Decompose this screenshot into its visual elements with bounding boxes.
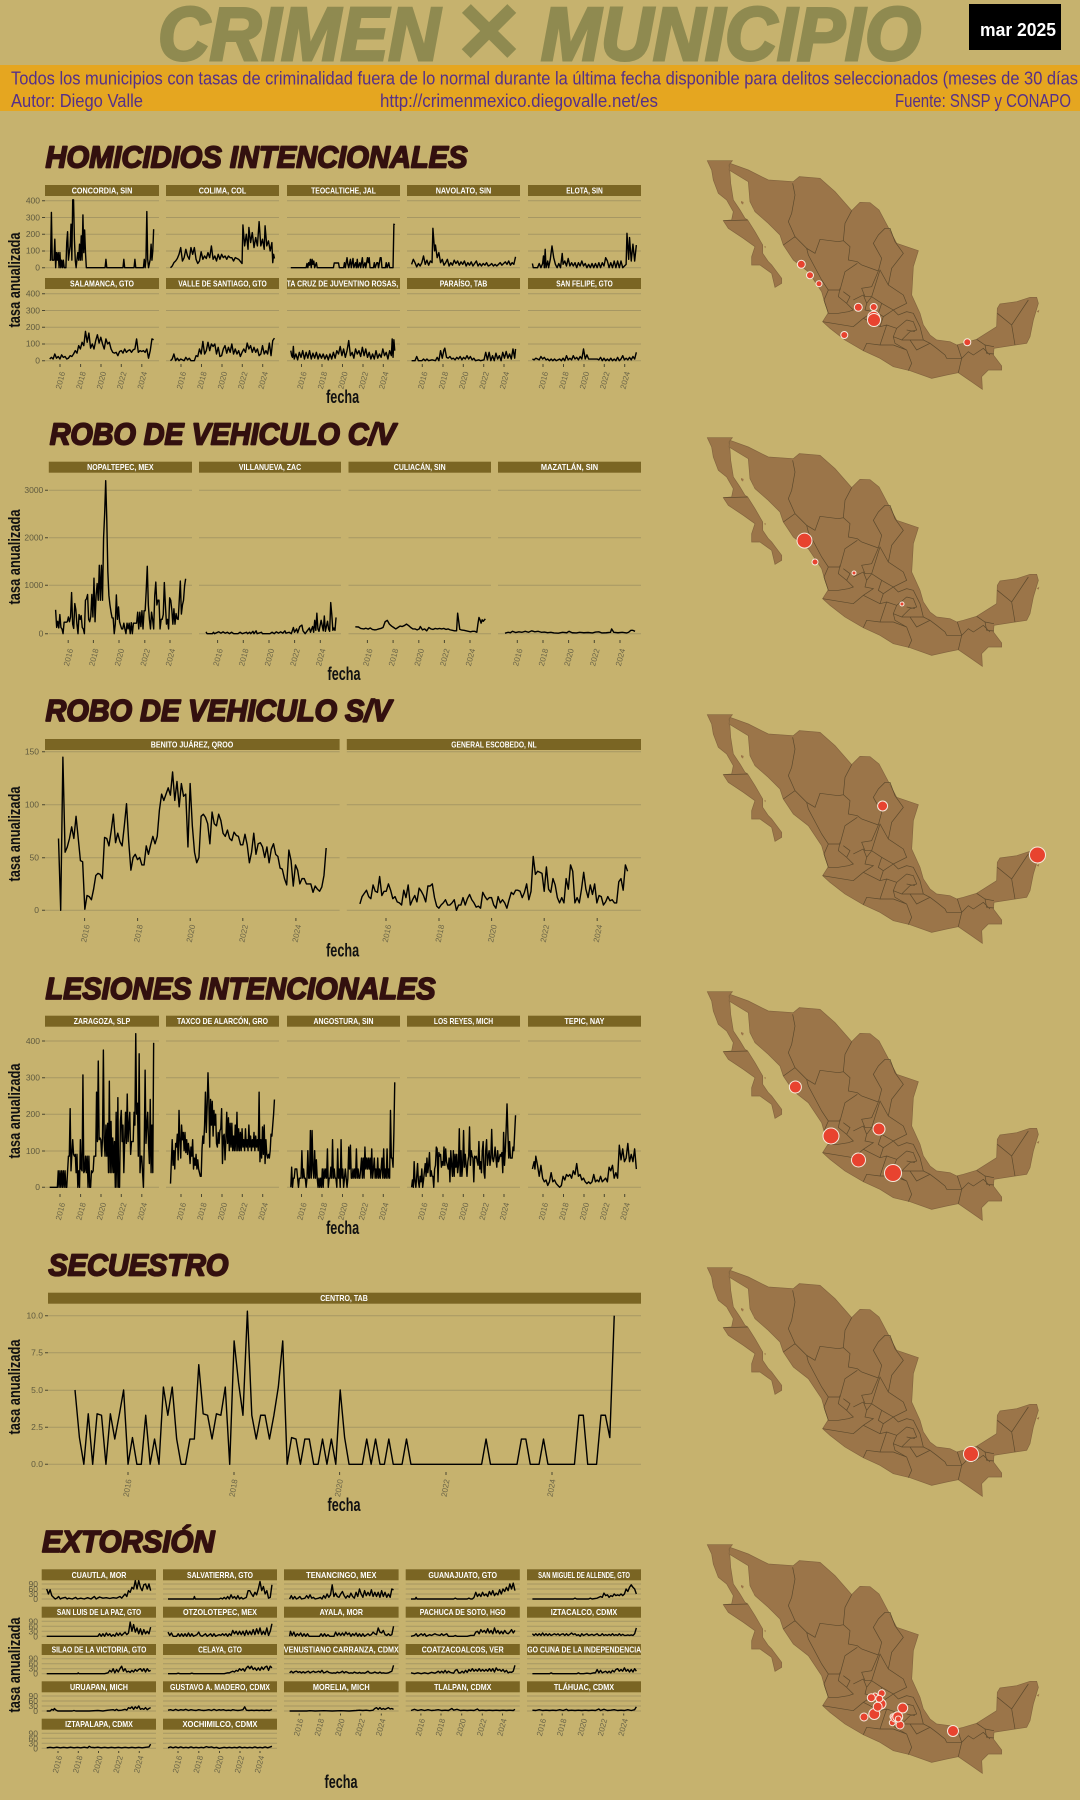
x axis ticks and years: 2018 bbox=[87, 647, 101, 667]
x axis label: fecha bbox=[326, 940, 360, 960]
x axis ticks and years: 2016 bbox=[212, 647, 225, 667]
x axis label: fecha bbox=[328, 1495, 361, 1515]
x axis ticks and years: 2020 bbox=[457, 370, 471, 390]
subtitle band: http://crimenmexico.diegovalle.net/es bbox=[380, 91, 658, 111]
chart: Benito Juárez: BENITO JUÁREZ, QROO bbox=[151, 740, 234, 750]
chart: Pachuca de Soto bbox=[406, 1607, 520, 1636]
y axis ticks: 30 bbox=[29, 1738, 38, 1748]
chart: Venustiano Carranza bbox=[284, 1644, 399, 1674]
x axis ticks and years: 2022 bbox=[236, 370, 250, 390]
x axis ticks and years: 2016 bbox=[535, 1717, 548, 1737]
x axis ticks and years: 2020 bbox=[336, 370, 350, 390]
y axis ticks: 300 bbox=[26, 212, 40, 222]
x axis label: fecha bbox=[326, 1218, 360, 1238]
x axis ticks and years: 2016 bbox=[292, 1717, 306, 1737]
chart: Celaya bbox=[163, 1644, 277, 1674]
x axis ticks and years: 2022 bbox=[478, 1201, 491, 1221]
x axis ticks and years: 2018 bbox=[75, 370, 88, 390]
x axis ticks and years: 2022 bbox=[598, 370, 612, 390]
chart: San Luis de la Paz bbox=[42, 1607, 156, 1636]
x axis ticks and years: 2018 bbox=[71, 1754, 85, 1774]
x axis ticks and years: 2022 bbox=[475, 1717, 489, 1737]
y axis ticks: 30 bbox=[29, 1664, 38, 1674]
x axis ticks and years: 2022 bbox=[236, 1201, 250, 1221]
chart: Concordia bbox=[45, 185, 159, 268]
y axis ticks: 0 bbox=[33, 1743, 38, 1753]
chart: Ayala bbox=[284, 1607, 399, 1636]
y axis ticks: 3000 bbox=[24, 485, 44, 495]
x axis ticks and years: 2024 bbox=[136, 370, 149, 390]
chart: Elota: ELOTA, SIN bbox=[566, 186, 603, 196]
y axis ticks: 2.5 bbox=[31, 1422, 43, 1432]
x axis ticks and years: 2018 bbox=[132, 923, 145, 943]
chart: Tepic: TEPIC, NAY bbox=[564, 1016, 605, 1026]
y axis ticks: 0 bbox=[33, 1669, 38, 1679]
x axis ticks and years: 2016 bbox=[175, 370, 188, 390]
y axis ticks: 90 bbox=[29, 1579, 38, 1589]
panel: robo de vehiculo s/v bbox=[5, 693, 1046, 960]
x axis ticks and years bbox=[62, 640, 627, 667]
x axis ticks and years: 2020 bbox=[413, 647, 426, 667]
y axis ticks: 100 bbox=[26, 1146, 40, 1156]
chart: Xochimilco: XOCHIMILCO, CDMX bbox=[182, 1719, 258, 1729]
x axis ticks and years: 2016 bbox=[295, 370, 309, 390]
chart: Tenancingo: TENANCINGO, MEX bbox=[306, 1570, 377, 1580]
x axis ticks and years: 2022 bbox=[357, 1201, 370, 1221]
x axis ticks and years: 2020 bbox=[333, 1478, 345, 1498]
date box: mar 2025 bbox=[980, 20, 1056, 40]
y axis label: tasa anualizada bbox=[5, 1063, 24, 1158]
chart: Ayala: AYALA, MOR bbox=[320, 1607, 363, 1617]
y axis ticks: 200 bbox=[26, 322, 40, 332]
chart: Mazatlán bbox=[498, 462, 641, 634]
x axis ticks and years: 2020 bbox=[263, 647, 276, 667]
x axis ticks and years: 2022 bbox=[478, 370, 491, 390]
x axis ticks and years: 2022 bbox=[438, 647, 452, 667]
x axis ticks and years: 2022 bbox=[588, 647, 602, 667]
y axis ticks: 30 bbox=[29, 1701, 38, 1711]
x axis ticks and years: 2020 bbox=[95, 1201, 108, 1221]
y axis ticks: 0 bbox=[33, 1706, 38, 1716]
y axis ticks: 90 bbox=[29, 1616, 38, 1626]
chart: Centro, Tab: CENTRO, TAB bbox=[320, 1293, 368, 1303]
chart: Teocaltiche: TEOCALTICHE, JAL bbox=[311, 186, 376, 196]
chart: Xochimilco bbox=[163, 1719, 277, 1748]
y axis ticks: 400 bbox=[26, 288, 40, 298]
chart: Angostura: ANGOSTURA, SIN bbox=[314, 1016, 374, 1026]
y axis ticks: 60 bbox=[29, 1584, 38, 1594]
chart: Gustavo A. Madero bbox=[163, 1681, 277, 1711]
x axis ticks and years: 2022 bbox=[357, 370, 370, 390]
x axis ticks and years: 2016 bbox=[122, 1478, 134, 1498]
x axis ticks and years: 2024 bbox=[164, 647, 177, 667]
chart: Navolato bbox=[407, 185, 520, 268]
chart: Cuautla: CUAUTLA, MOR bbox=[72, 1570, 126, 1580]
x axis ticks and years: 2016 bbox=[381, 923, 393, 943]
y axis ticks: 90 bbox=[29, 1728, 38, 1738]
y axis ticks: 60 bbox=[29, 1696, 38, 1706]
x axis ticks and years: 2024 bbox=[377, 370, 391, 390]
title bbox=[158, 0, 921, 89]
y axis ticks: 0 bbox=[35, 1182, 40, 1192]
map: robo s/v bbox=[707, 715, 1046, 943]
chart: Navolato: NAVOLATO, SIN bbox=[436, 186, 491, 196]
chart: San Felipe: SAN FELIPE, GTO bbox=[556, 278, 613, 288]
chart: Iztapalapa: IZTAPALAPA, CDMX bbox=[65, 1719, 133, 1729]
chart: Morelia bbox=[284, 1681, 399, 1711]
heading: homicidios: HOMICIDIOS INTENCIONALES bbox=[46, 140, 468, 174]
x axis ticks and years: 2020 bbox=[212, 1754, 226, 1774]
y axis ticks bbox=[29, 1579, 38, 1753]
x axis ticks and years: 2024 bbox=[619, 370, 632, 390]
x axis ticks and years: 2016 bbox=[537, 1201, 550, 1221]
chart: Valle de Santiago: VALLE DE SANTIAGO, GTO bbox=[178, 278, 267, 288]
y axis ticks: 60 bbox=[29, 1621, 38, 1631]
y axis ticks: 1000 bbox=[24, 580, 44, 590]
x axis ticks and years: 2020 bbox=[336, 1201, 350, 1221]
chart: Villanueva: VILLANUEVA, ZAC bbox=[239, 462, 301, 472]
x axis ticks and years: 2024 bbox=[592, 923, 604, 943]
chart: Iztapalapa bbox=[42, 1719, 156, 1748]
chart: San Luis de la Paz: SAN LUIS DE LA PAZ, GTO bbox=[57, 1607, 141, 1617]
x axis ticks and years: 2024 bbox=[136, 1201, 149, 1221]
x axis ticks and years: 2024 bbox=[132, 1754, 146, 1774]
x axis ticks and years: 2018 bbox=[434, 923, 446, 943]
chart: Tlalpan bbox=[406, 1681, 520, 1711]
x axis ticks and years: 2022 bbox=[596, 1717, 609, 1737]
chart: San Miguel de Allende bbox=[527, 1569, 641, 1599]
panel: homicidios intencionales bbox=[5, 140, 1039, 407]
map: lesiones bbox=[707, 992, 1039, 1220]
y axis ticks bbox=[26, 1310, 48, 1469]
x axis ticks and years: 2024 bbox=[464, 647, 477, 667]
y axis ticks: 90 bbox=[29, 1691, 38, 1701]
y axis ticks: 30 bbox=[29, 1589, 38, 1599]
y axis label: tasa anualizada bbox=[5, 509, 24, 604]
chart: Mazatlán: MAZATLÁN, SIN bbox=[541, 462, 598, 472]
chart: Salvatierra: SALVATIERRA, GTO bbox=[187, 1570, 253, 1580]
map: extorsión bbox=[707, 1545, 1039, 1773]
x axis ticks and years bbox=[122, 1472, 558, 1498]
chart: Colima: COLIMA, COL bbox=[199, 186, 246, 196]
x axis label: fecha bbox=[324, 1772, 358, 1792]
chart: Iztacalco bbox=[527, 1607, 641, 1636]
y axis ticks bbox=[26, 1036, 45, 1192]
chart: Paraíso: PARAÍSO, TAB bbox=[440, 278, 487, 288]
chart: Dolores Hidalgo bbox=[470, 1644, 698, 1674]
y axis ticks: 30 bbox=[29, 1626, 38, 1636]
x axis ticks and years: 2020 bbox=[113, 647, 126, 667]
x axis label: fecha bbox=[326, 387, 360, 407]
x axis ticks and years: 2018 bbox=[555, 1717, 569, 1737]
chart: Celaya: CELAYA, GTO bbox=[198, 1644, 242, 1654]
x axis ticks and years: 2024 bbox=[314, 647, 328, 667]
chart: Taxco de Alarcón bbox=[166, 1015, 279, 1187]
x axis ticks and years: 2018 bbox=[437, 1201, 450, 1221]
panel: robo de vehiculo c/v bbox=[5, 416, 1039, 684]
x axis ticks and years: 2022 bbox=[539, 923, 551, 943]
chart: Iztacalco: IZTACALCO, CDMX bbox=[551, 1607, 618, 1617]
heading: extorsión: EXTORSIÓN bbox=[42, 1524, 215, 1559]
x axis ticks and years: 2024 bbox=[257, 370, 270, 390]
y axis ticks: 200 bbox=[26, 1109, 40, 1119]
x axis ticks and years bbox=[51, 1714, 630, 1774]
x axis ticks and years: 2020 bbox=[578, 370, 591, 390]
x axis ticks and years: 2016 bbox=[62, 647, 75, 667]
x axis ticks and years: 2016 bbox=[295, 1201, 309, 1221]
chart: Nopaltepec: NOPALTEPEC, MEX bbox=[87, 462, 154, 472]
map: secuestro bbox=[707, 1268, 1039, 1496]
chart: Angostura bbox=[287, 1016, 400, 1187]
x axis ticks and years: 2018 bbox=[316, 1201, 329, 1221]
x axis ticks and years: 2024 bbox=[617, 1717, 630, 1737]
x axis ticks and years: 2016 bbox=[537, 370, 550, 390]
y axis ticks: 100 bbox=[26, 339, 40, 349]
x axis ticks and years: 2024 bbox=[495, 1717, 509, 1737]
y axis ticks: 2000 bbox=[24, 532, 44, 542]
chart: Valle de Santiago bbox=[166, 278, 279, 361]
x axis ticks and years: 2018 bbox=[557, 370, 571, 390]
y axis label: tasa anualizada bbox=[5, 1617, 24, 1712]
x axis ticks and years: 2018 bbox=[387, 647, 400, 667]
y axis ticks: 60 bbox=[29, 1733, 38, 1743]
heading: robo s/v: ROBO DE VEHICULO S/V bbox=[46, 693, 394, 728]
y axis label: tasa anualizada bbox=[5, 1339, 24, 1434]
chart: Silao de la Victoria: SILAO DE LA VICTORIA, GTO bbox=[52, 1644, 147, 1654]
x axis ticks and years bbox=[79, 918, 604, 943]
x axis ticks and years: 2020 bbox=[578, 1201, 591, 1221]
subtitle band: Autor: Diego Valle bbox=[11, 91, 143, 111]
chart: Nopaltepec bbox=[49, 462, 192, 634]
y axis ticks: 200 bbox=[26, 229, 40, 239]
chart: Culiacán bbox=[348, 462, 491, 634]
subtitle band bbox=[0, 65, 1080, 111]
panel: extorsión bbox=[5, 1524, 1039, 1792]
y axis label: tasa anualizada bbox=[5, 786, 24, 882]
chart: Otzolotepec: OTZOLOTEPEC, MEX bbox=[183, 1607, 257, 1617]
y axis label: tasa anualizada bbox=[5, 232, 24, 328]
x axis ticks and years: 2018 bbox=[237, 647, 251, 667]
x axis ticks and years: 2016 bbox=[416, 370, 430, 390]
chart: Coatzacoalcos: COATZACOALCOS, VER bbox=[422, 1644, 504, 1654]
map: homicidios bbox=[707, 161, 1039, 389]
y axis ticks: 50 bbox=[30, 852, 39, 862]
x axis ticks and years: 2018 bbox=[313, 1717, 326, 1737]
chart: Pachuca de Soto: PACHUCA DE SOTO, HGO bbox=[420, 1607, 506, 1617]
chart: Tepic bbox=[528, 1016, 641, 1187]
x axis ticks and years: 2018 bbox=[195, 370, 209, 390]
x axis ticks and years: 2020 bbox=[91, 1754, 105, 1774]
chart: Los Reyes: LOS REYES, MICH bbox=[434, 1016, 493, 1026]
x axis ticks and years: 2020 bbox=[216, 370, 229, 390]
x axis ticks and years: 2016 bbox=[51, 1754, 64, 1774]
chart: Centro, Tab bbox=[48, 1293, 641, 1464]
chart: San Felipe bbox=[528, 278, 641, 361]
chart: Uruapan: URUAPAN, MICH bbox=[70, 1682, 128, 1692]
chart: Tenancingo bbox=[284, 1569, 399, 1599]
chart: Villanueva bbox=[199, 462, 341, 634]
y axis ticks: 0 bbox=[33, 1631, 38, 1641]
chart: Cuautla bbox=[42, 1569, 156, 1599]
x axis ticks and years: 2024 bbox=[614, 647, 627, 667]
x axis ticks and years: 2018 bbox=[557, 1201, 571, 1221]
chart: Morelia: MORELIA, MICH bbox=[313, 1682, 370, 1692]
chart: San Miguel de Allende: SAN MIGUEL DE ALLENDE, GTO bbox=[538, 1570, 630, 1580]
x axis ticks and years: 2018 bbox=[316, 370, 329, 390]
x axis ticks and years: 2016 bbox=[416, 1201, 430, 1221]
chart: Benito Juárez bbox=[45, 739, 340, 910]
chart: Concordia: CONCORDIA, SIN bbox=[72, 186, 132, 196]
x axis ticks and years bbox=[54, 364, 632, 390]
y axis ticks: 0.0 bbox=[31, 1459, 43, 1469]
chart: General Escobedo: GENERAL ESCOBEDO, NL bbox=[451, 740, 537, 750]
x axis ticks and years bbox=[54, 1194, 632, 1221]
y axis ticks bbox=[25, 746, 45, 915]
x axis ticks and years: 2022 bbox=[289, 647, 302, 667]
y axis ticks: 300 bbox=[26, 305, 40, 315]
y axis ticks bbox=[24, 485, 48, 638]
heading: secuestro: SECUESTRO bbox=[48, 1248, 228, 1282]
chart: Gustavo A. Madero: GUSTAVO A. MADERO, CDMX bbox=[170, 1682, 270, 1692]
x axis ticks and years: 2018 bbox=[228, 1478, 240, 1498]
x axis ticks and years: 2020 bbox=[95, 370, 108, 390]
y axis ticks: 0 bbox=[33, 1594, 38, 1604]
y axis ticks: 300 bbox=[26, 1072, 40, 1082]
chart: Colima bbox=[166, 185, 279, 268]
x axis ticks and years: 2022 bbox=[238, 923, 250, 943]
chart: Teocaltiche bbox=[287, 185, 400, 268]
x axis ticks and years: 2018 bbox=[434, 1717, 447, 1737]
x axis ticks and years: 2024 bbox=[374, 1717, 388, 1737]
x axis ticks and years: 2018 bbox=[75, 1201, 88, 1221]
chart: Paraíso bbox=[407, 278, 520, 361]
y axis ticks bbox=[26, 196, 45, 366]
x axis ticks and years: 2020 bbox=[486, 923, 499, 943]
y axis ticks: 5.0 bbox=[31, 1385, 43, 1395]
x axis ticks and years: 2016 bbox=[171, 1754, 184, 1774]
y axis ticks: 100 bbox=[26, 246, 40, 256]
x axis ticks and years: 2022 bbox=[139, 647, 152, 667]
x axis ticks and years: 2022 bbox=[598, 1201, 612, 1221]
x axis label: fecha bbox=[328, 664, 361, 684]
chart: Salamanca bbox=[45, 278, 159, 361]
y axis ticks: 90 bbox=[29, 1654, 38, 1664]
chart: Coatzacoalcos bbox=[406, 1644, 520, 1674]
y axis ticks: 100 bbox=[25, 800, 39, 810]
x axis ticks and years: 2022 bbox=[233, 1754, 246, 1774]
x axis ticks and years: 2020 bbox=[216, 1201, 229, 1221]
heading: lesiones: LESIONES INTENCIONALES bbox=[46, 971, 436, 1006]
x axis ticks and years: 2024 bbox=[498, 1201, 511, 1221]
chart: Zaragoza: ZARAGOZA, SLP bbox=[74, 1016, 130, 1026]
chart: Guanajuato: GUANAJUATO, GTO bbox=[428, 1570, 497, 1580]
chart: Guanajuato bbox=[406, 1569, 520, 1599]
x axis ticks and years: 2024 bbox=[546, 1478, 558, 1498]
chart: Silao de la Victoria bbox=[42, 1644, 156, 1674]
x axis ticks and years: 2016 bbox=[361, 647, 375, 667]
chart: Taxco de Alarcón: TAXCO DE ALARCÓN, GRO bbox=[177, 1015, 268, 1026]
y axis ticks: 10.0 bbox=[26, 1310, 43, 1320]
x axis ticks and years: 2020 bbox=[576, 1717, 589, 1737]
x axis ticks and years: 2022 bbox=[440, 1478, 452, 1498]
x axis ticks and years: 2016 bbox=[414, 1717, 427, 1737]
y axis ticks: 0 bbox=[35, 356, 40, 366]
x axis ticks and years: 2020 bbox=[185, 923, 197, 943]
y axis ticks: 60 bbox=[29, 1659, 38, 1669]
panel: secuestro bbox=[5, 1248, 1039, 1515]
chart: General Escobedo bbox=[347, 739, 641, 910]
x axis ticks and years: 2016 bbox=[79, 923, 92, 943]
x axis ticks and years: 2024 bbox=[377, 1201, 391, 1221]
x axis ticks and years: 2024 bbox=[253, 1754, 266, 1774]
x axis ticks and years: 2018 bbox=[437, 370, 450, 390]
chart: Uruapan bbox=[42, 1681, 156, 1711]
chart: Los Reyes bbox=[407, 1016, 520, 1187]
x axis ticks and years: 2016 bbox=[54, 1201, 67, 1221]
x axis ticks and years: 2022 bbox=[115, 1201, 129, 1221]
panel: lesiones intencionales bbox=[5, 971, 1039, 1238]
x axis ticks and years: 2024 bbox=[498, 370, 511, 390]
x axis ticks and years: 2018 bbox=[537, 647, 550, 667]
chart: Elota bbox=[528, 185, 641, 268]
x axis ticks and years: 2022 bbox=[115, 370, 129, 390]
chart: Tláhuac: TLÁHUAC, CDMX bbox=[554, 1682, 614, 1692]
y axis ticks: 7.5 bbox=[31, 1348, 43, 1358]
chart: Otzolotepec bbox=[163, 1607, 277, 1636]
y axis ticks: 150 bbox=[25, 746, 39, 756]
x axis ticks and years: 2018 bbox=[195, 1201, 209, 1221]
x axis ticks and years: 2016 bbox=[511, 647, 525, 667]
heading: robo c/v: ROBO DE VEHICULO C/V bbox=[50, 416, 398, 452]
x axis ticks and years: 2016 bbox=[54, 370, 67, 390]
x axis ticks and years: 2024 bbox=[291, 923, 303, 943]
x axis ticks and years: 2022 bbox=[112, 1754, 125, 1774]
y axis ticks: 0 bbox=[35, 262, 40, 272]
x axis ticks and years: 2024 bbox=[619, 1201, 632, 1221]
x axis ticks and years: 2020 bbox=[457, 1201, 471, 1221]
chart: Culiacán: CULIACÁN, SIN bbox=[394, 462, 446, 472]
x axis ticks and years: 2020 bbox=[563, 647, 576, 667]
date box bbox=[969, 4, 1061, 50]
y axis ticks: 0 bbox=[39, 628, 44, 638]
chart: Tlalpan: TLALPAN, CDMX bbox=[434, 1682, 492, 1692]
x axis ticks and years: 2016 bbox=[175, 1201, 188, 1221]
x axis ticks and years: 2018 bbox=[192, 1754, 205, 1774]
y axis ticks: 400 bbox=[26, 196, 40, 206]
chart: Salvatierra bbox=[163, 1569, 277, 1599]
x axis ticks and years: 2020 bbox=[455, 1717, 468, 1737]
chart: Santa Cruz de Juventino Rosas bbox=[272, 278, 415, 361]
y axis ticks: 0 bbox=[34, 905, 39, 915]
x axis ticks and years: 2020 bbox=[333, 1717, 347, 1737]
x axis ticks and years: 2022 bbox=[354, 1717, 367, 1737]
map: robo c/v bbox=[707, 438, 1039, 666]
chart: Salamanca: SALAMANCA, GTO bbox=[70, 278, 134, 288]
chart: Zaragoza bbox=[45, 1016, 159, 1187]
y axis ticks: 400 bbox=[26, 1036, 40, 1046]
chart: Tláhuac bbox=[527, 1681, 641, 1711]
x axis ticks and years: 2024 bbox=[257, 1201, 270, 1221]
